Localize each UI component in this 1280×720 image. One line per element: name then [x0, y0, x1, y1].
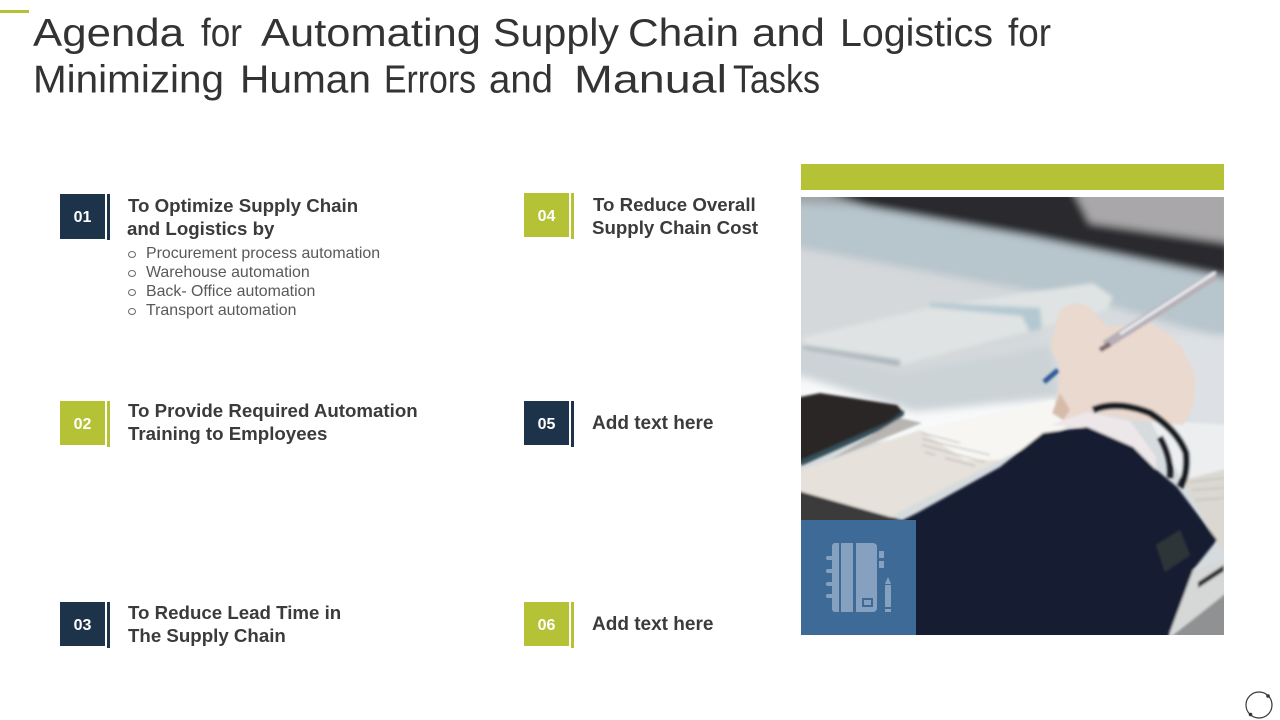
- item 03 heading: The Supply Chain: [128, 625, 286, 646]
- item 01 bullet list: Warehouse automation: [146, 264, 310, 281]
- handwriting: [922, 433, 990, 466]
- title: and: [489, 58, 553, 102]
- sleeve: [895, 427, 1217, 640]
- phone: [795, 393, 904, 465]
- item 01 heading: [127, 195, 358, 239]
- photo: hand writing at a desk: [801, 197, 1224, 635]
- item 01 bullet list: Procurement process automation: [146, 245, 380, 262]
- item 01 badge: 01: [74, 209, 91, 226]
- item 02 heading: [128, 400, 418, 444]
- item 03 badge: 03: [74, 617, 91, 634]
- item 01 bullet list: Transport automation: [146, 302, 296, 319]
- item 03 heading: [128, 602, 341, 646]
- item 04 heading: Supply Chain Cost: [592, 217, 758, 238]
- title: Manual: [574, 58, 727, 102]
- item 05 badge: 05: [538, 416, 555, 433]
- accent line: [0, 10, 29, 13]
- title: Chain: [628, 12, 739, 55]
- title: and: [752, 12, 825, 55]
- item 06 badge: 06: [538, 617, 555, 634]
- item 01 bullet list: [128, 245, 380, 319]
- title: Logistics: [840, 12, 993, 55]
- item 04 badge: 04: [538, 208, 555, 225]
- hand: [1050, 303, 1196, 425]
- title: for: [1008, 12, 1051, 55]
- bracelet: [1093, 406, 1186, 487]
- item 02 badge: 02: [74, 416, 91, 433]
- title: Errors: [384, 58, 476, 102]
- lime band above photo: [801, 164, 1224, 190]
- cuff: [1050, 412, 1156, 470]
- item 01 bullet list: Back- Office automation: [146, 283, 315, 300]
- title: Automating: [261, 12, 481, 55]
- item 04 heading: To Reduce Overall: [593, 194, 756, 215]
- item 01 heading: To Optimize Supply Chain: [128, 195, 358, 216]
- item 02 heading: To Provide Required Automation: [128, 400, 418, 421]
- item 05 heading: Add text here: [592, 413, 713, 434]
- item 06 heading: Add text here: [592, 614, 713, 635]
- loading ring icon: [1245, 691, 1273, 719]
- title: Agenda: [33, 12, 185, 55]
- title: [33, 12, 1051, 102]
- title: Tasks: [733, 58, 820, 102]
- notebook: [795, 400, 1067, 517]
- item 04 heading: [592, 194, 758, 238]
- item 02 heading: Training to Employees: [128, 423, 327, 444]
- right side surface: [1150, 420, 1230, 482]
- title: Minimizing: [33, 58, 224, 102]
- item 01 heading: and Logistics by: [127, 218, 274, 239]
- title: for: [201, 12, 242, 55]
- pen: [1105, 275, 1215, 345]
- right paper: [1183, 468, 1230, 560]
- icon tile: notebook and pencil: [801, 520, 916, 635]
- title: Supply: [493, 12, 620, 55]
- title: Human: [240, 58, 371, 102]
- newspaper: [803, 283, 1113, 365]
- item 03 heading: To Reduce Lead Time in: [128, 602, 341, 623]
